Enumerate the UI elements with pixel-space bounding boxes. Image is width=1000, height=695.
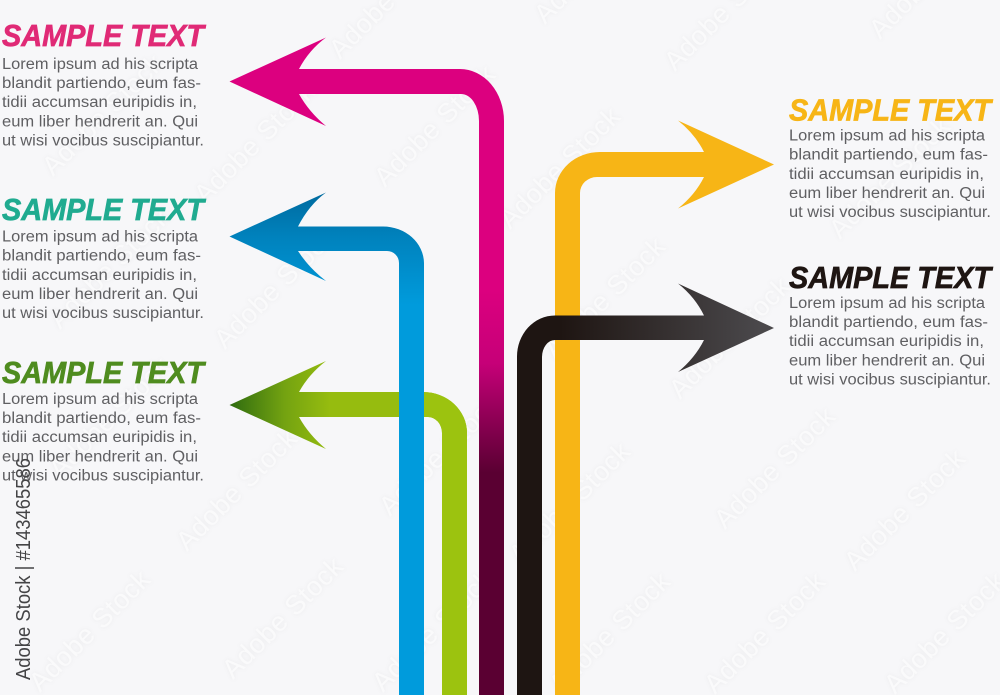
- body copy: eum liber hendrerit an. Qui: [2, 114, 198, 130]
- body copy: blandit partiendo, eum fas-: [2, 410, 201, 427]
- watermark pattern: Adobe Stock: [838, 443, 971, 576]
- body copy: ut wisi vocibus suscipiantur.: [2, 468, 204, 484]
- heading: SAMPLE TEXT: [2, 192, 207, 227]
- heading: SAMPLE TEXT: [2, 18, 207, 53]
- arrow: green: [230, 361, 467, 695]
- text block: green: [2, 355, 207, 484]
- body copy: ut wisi vocibus suscipiantur.: [2, 305, 204, 322]
- body copy: blandit partiendo, eum fas-: [789, 314, 988, 331]
- body copy: [789, 128, 991, 221]
- body copy: blandit partiendo, eum fas-: [789, 146, 988, 164]
- heading: SAMPLE TEXT: [789, 260, 994, 295]
- body copy: Lorem ipsum ad his scripta: [2, 391, 198, 408]
- text block: teal: [2, 192, 207, 322]
- watermark pattern: Adobe Stock: [23, 564, 156, 695]
- heading: SAMPLE TEXT: [2, 355, 207, 390]
- watermark pattern: Adobe Stock: [493, 101, 626, 234]
- green shaft colour: [400, 392, 467, 695]
- body copy: tidii accumsan euripidis in,: [2, 267, 197, 284]
- watermark pattern: Adobe Stock: [663, 271, 796, 404]
- watermark pattern: Adobe Stock: [366, 564, 499, 695]
- side credit: Adobe Stock | #143465586: [13, 458, 35, 680]
- body copy: eum liber hendrerit an. Qui: [789, 352, 985, 370]
- watermark pattern: Adobe Stock: [708, 401, 841, 534]
- body copy: tidii accumsan euripidis in,: [789, 333, 984, 350]
- watermark pattern: Adobe Stock: [43, 201, 176, 334]
- body copy: blandit partiendo, eum fas-: [2, 248, 201, 264]
- watermark pattern: Adobe Stock: [368, 59, 501, 192]
- watermark pattern: Adobe Stock: [36, 48, 169, 181]
- body copy: ut wisi vocibus suscipiantur.: [789, 204, 991, 221]
- text block: magenta: [2, 18, 207, 150]
- text block: black: [789, 260, 994, 388]
- body copy: tidii accumsan euripidis in,: [2, 94, 197, 111]
- arrow: yellow: [555, 120, 774, 695]
- text block: yellow: [789, 92, 994, 221]
- body copy: Lorem ipsum ad his scripta: [2, 228, 198, 246]
- body copy: [2, 228, 204, 322]
- heading: SAMPLE TEXT: [789, 92, 994, 128]
- body copy: tidii accumsan euripidis in,: [789, 166, 984, 183]
- body copy: [2, 391, 204, 484]
- body copy: eum liber hendrerit an. Qui: [2, 448, 198, 466]
- watermark pattern: Adobe Stock: [823, 111, 956, 244]
- watermark pattern: Adobe Stock: [216, 551, 349, 684]
- body copy: ut wisi vocibus suscipiantur.: [2, 132, 204, 150]
- body copy: tidii accumsan euripidis in,: [2, 429, 197, 446]
- watermark pattern: Adobe Stock: [503, 436, 636, 569]
- watermark pattern: Adobe Stock: [170, 423, 303, 556]
- arrow: magenta: [230, 38, 504, 695]
- body copy: eum liber hendrerit an. Qui: [2, 286, 198, 303]
- watermark pattern: Adobe Stock: [538, 231, 671, 364]
- body copy: ut wisi vocibus suscipiantur.: [789, 372, 991, 388]
- arrow: black: [517, 284, 774, 695]
- body copy: [2, 56, 204, 150]
- body copy: Lorem ipsum ad his scripta: [789, 295, 985, 312]
- body copy: Lorem ipsum ad his scripta: [789, 128, 985, 144]
- watermark pattern: Adobe Stock: [373, 388, 506, 521]
- body copy: eum liber hendrerit an. Qui: [789, 185, 985, 202]
- watermark pattern: Adobe Stock: [208, 221, 341, 354]
- watermark pattern: Adobe Stock: [188, 76, 321, 209]
- body copy: Lorem ipsum ad his scripta: [2, 56, 198, 73]
- watermark pattern: Adobe Stock: [43, 351, 176, 484]
- arrow: blue: [230, 192, 424, 695]
- body copy: blandit partiendo, eum fas-: [2, 75, 201, 92]
- body copy: [789, 295, 991, 388]
